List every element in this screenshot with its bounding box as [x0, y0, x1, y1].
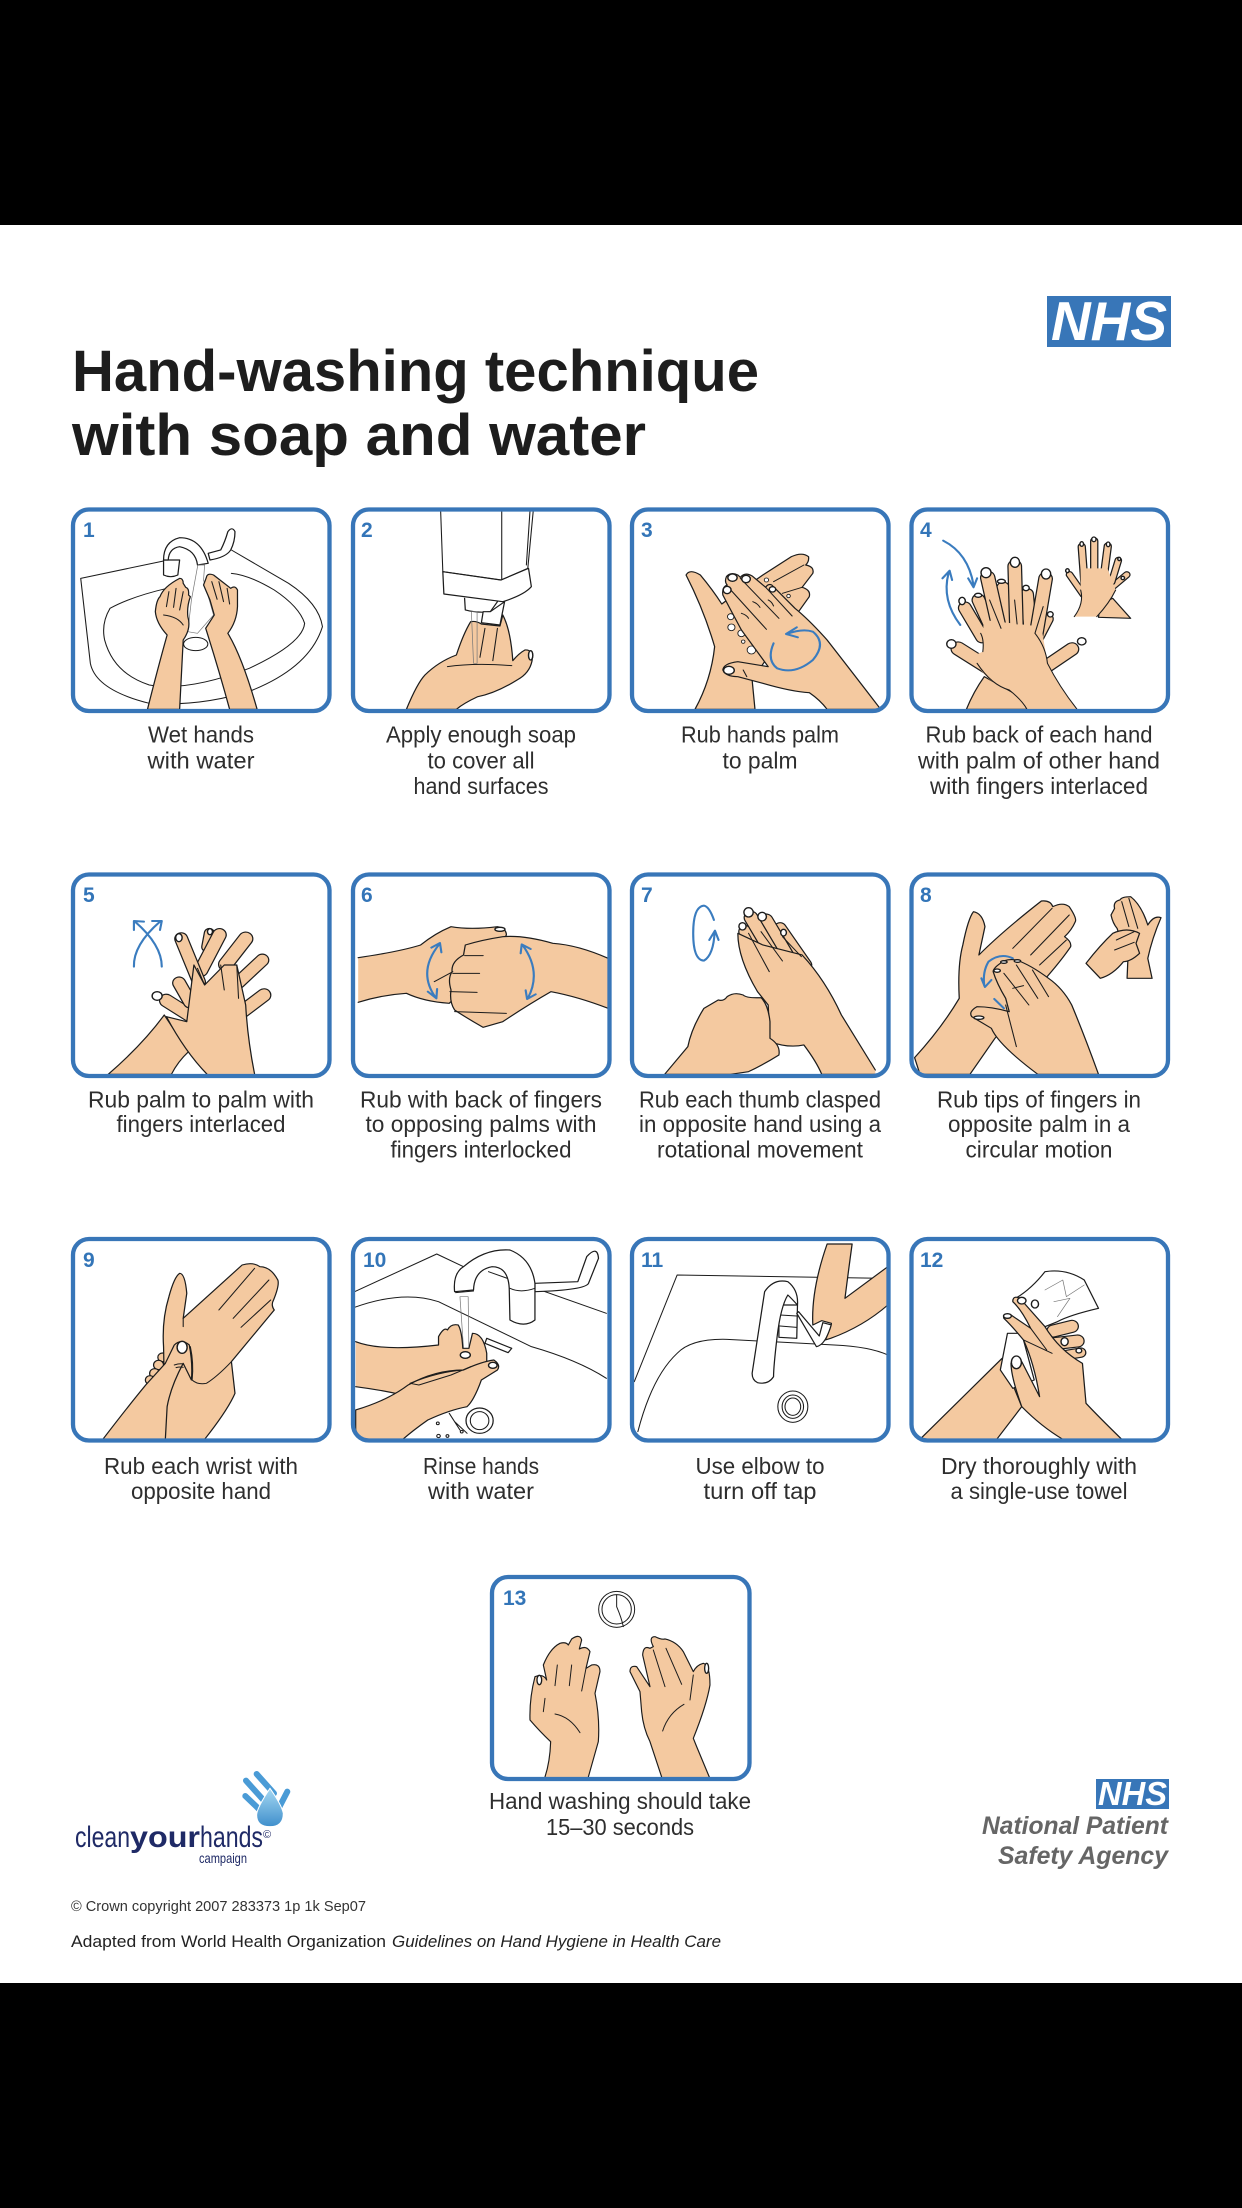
- arrow: rotation: [693, 906, 719, 961]
- caption 12: Dry thoroughly with: [941, 1453, 1137, 1479]
- rear hand: [108, 928, 274, 1074]
- clean your hands logo: ©: [263, 1829, 271, 1841]
- icon: hand with water drop: [245, 1774, 287, 1827]
- panel border: [912, 874, 1168, 1076]
- National Patient Safety Agency logo: [982, 1775, 1170, 1870]
- caption 2: to cover all: [428, 748, 534, 774]
- caption 9: opposite hand: [131, 1478, 271, 1504]
- panel border: [632, 874, 888, 1076]
- step number: 8: [920, 884, 932, 907]
- caption 1: [146, 722, 255, 774]
- step number: 6: [361, 884, 373, 907]
- panel: step 5 fingers interlaced: [73, 874, 330, 1076]
- caption 7: in opposite hand using a: [639, 1111, 881, 1137]
- drain: [466, 1408, 493, 1433]
- caption 12: a single-use towel: [950, 1478, 1128, 1504]
- copyright line: © Crown copyright 2007 283373 1p 1k Sep07: [71, 1898, 366, 1915]
- left hand: [530, 1636, 600, 1777]
- arrow: circular: [771, 627, 820, 670]
- rubbing hand: [971, 960, 1099, 1074]
- National Patient Safety Agency logo: Safety Agency: [998, 1842, 1169, 1870]
- arrows: crossing: [134, 921, 162, 967]
- source line: [71, 1932, 721, 1951]
- soap dispenser: [441, 512, 533, 612]
- step number: 1: [83, 519, 95, 542]
- NHS logo: NHS: [1051, 290, 1167, 352]
- lower hand: [356, 1360, 499, 1439]
- panel border: [73, 1239, 330, 1440]
- caption 13: Hand washing should take: [489, 1788, 751, 1814]
- inset hands: [1065, 537, 1131, 618]
- panel border: [632, 1239, 888, 1440]
- water stream: [460, 1297, 469, 1348]
- panel: step 2 apply soap: [353, 510, 610, 711]
- clean your hands logo: hands: [200, 1821, 263, 1854]
- step number: 2: [361, 519, 373, 542]
- caption 4: with fingers interlaced: [929, 773, 1148, 799]
- panel: step 8 fingertips: [912, 874, 1168, 1076]
- step number: 9: [83, 1249, 95, 1272]
- National Patient Safety Agency logo: NHS: [1098, 1775, 1167, 1812]
- caption 2: Apply enough soap: [386, 722, 576, 748]
- tap: [164, 529, 235, 577]
- caption 11: Use elbow to: [696, 1453, 824, 1479]
- step number: 11: [641, 1249, 664, 1272]
- caption 11: turn off tap: [704, 1478, 816, 1504]
- arm: [813, 1244, 888, 1340]
- step number: 13: [503, 1587, 526, 1610]
- hand: [406, 615, 533, 709]
- right hand: [204, 574, 257, 709]
- sink lines: [634, 1275, 888, 1432]
- panel: step 12 dry: [912, 1239, 1168, 1440]
- caption 10: Rinse hands: [423, 1453, 539, 1479]
- caption 10: with water: [427, 1478, 534, 1504]
- caption 13: [489, 1788, 751, 1840]
- panel: step 11 elbow: [632, 1239, 888, 1440]
- inset hands: [1086, 897, 1161, 978]
- clock: [599, 1591, 635, 1627]
- source line: Guidelines on Hand Hygiene in Health Care: [392, 1932, 721, 1951]
- caption 8: opposite palm in a: [948, 1111, 1130, 1137]
- caption 11: [696, 1453, 824, 1504]
- arrows: two-way: [427, 943, 536, 999]
- panel border: [353, 1239, 610, 1440]
- rear arm: [920, 1358, 1022, 1439]
- panel: step 1 wet hands: [73, 510, 330, 711]
- open hand: [915, 901, 1076, 1074]
- water: [188, 565, 214, 633]
- panel: step 13 finished: [492, 1577, 750, 1779]
- panel border: [492, 1577, 750, 1779]
- front hand: [723, 574, 881, 709]
- front hand: [1004, 1297, 1122, 1439]
- left hand: [358, 927, 506, 1003]
- title: Hand-washing technique: [72, 339, 759, 404]
- caption 1: with water: [146, 748, 255, 774]
- towel: [1000, 1271, 1099, 1388]
- caption 5: [88, 1086, 314, 1137]
- caption 4: [917, 722, 1160, 799]
- front hand: [166, 926, 256, 1074]
- panel: step 4 back of hands: [912, 510, 1168, 711]
- panel: step 3 palm to palm: [632, 510, 888, 711]
- arrow upper: [981, 956, 1013, 987]
- caption 5: Rub palm to palm with: [88, 1086, 314, 1112]
- step number: 5: [83, 884, 95, 907]
- caption 4: with palm of other hand: [917, 748, 1160, 774]
- open hand: [737, 908, 875, 1074]
- panel border: [353, 510, 610, 711]
- step number: 7: [641, 884, 653, 907]
- caption 6: to opposing palms with: [366, 1111, 596, 1137]
- caption 9: Rub each wrist with: [104, 1453, 298, 1479]
- small bar: [485, 1338, 512, 1353]
- panel: step 9 wrist: [73, 1239, 330, 1440]
- step number: 4: [920, 519, 932, 542]
- source line: Adapted from World Health Organization: [71, 1932, 386, 1951]
- panel: step 10 rinse: [353, 1239, 610, 1440]
- clean your hands logo: campaign: [199, 1850, 247, 1866]
- step number: 3: [641, 519, 653, 542]
- tap: [454, 1250, 599, 1324]
- gripping hand: [103, 1341, 192, 1439]
- panel: step 7 rotating thumb: [632, 874, 888, 1076]
- caption 6: [360, 1086, 602, 1162]
- National Patient Safety Agency logo: National Patient: [982, 1812, 1170, 1840]
- panel border: [632, 510, 888, 711]
- step number: 12: [920, 1249, 943, 1272]
- fist: [665, 994, 779, 1074]
- title: [71, 339, 759, 468]
- caption 8: Rub tips of fingers in: [937, 1086, 1141, 1112]
- rear fingers: [1045, 1319, 1087, 1361]
- panel border: [73, 510, 330, 711]
- caption 7: [639, 1086, 881, 1162]
- caption 2: [386, 722, 576, 799]
- panel border: [73, 874, 330, 1076]
- caption 13: 15–30 seconds: [546, 1814, 694, 1840]
- caption 10: [423, 1453, 539, 1504]
- panel border: [912, 510, 1168, 711]
- caption 3: Rub hands palm: [681, 722, 839, 748]
- caption 8: [937, 1086, 1141, 1162]
- sink lines: [355, 1254, 606, 1378]
- front hand: [947, 557, 1086, 709]
- caption 3: [681, 722, 839, 774]
- clean your hands logo: clean: [75, 1821, 130, 1854]
- right hand: [630, 1637, 710, 1777]
- back hand: [686, 554, 813, 709]
- wrapped fingers: [145, 1353, 167, 1384]
- left hand: [147, 578, 190, 709]
- pump: [481, 602, 505, 625]
- panel: step 6 fingers interlocked: [353, 874, 610, 1076]
- right fist: [434, 936, 608, 1027]
- caption 9: [104, 1453, 298, 1504]
- soap bubbles: [727, 578, 790, 654]
- plughole: [778, 1391, 808, 1422]
- panel border: [912, 1239, 1168, 1440]
- arrow lower: [994, 999, 1004, 1008]
- soap stream: [471, 612, 477, 663]
- splashes: [436, 1413, 467, 1438]
- caption 7: rotational movement: [657, 1136, 864, 1162]
- caption 12: [941, 1453, 1137, 1504]
- caption 1: Wet hands: [148, 722, 254, 748]
- open hand: [163, 1264, 278, 1439]
- caption 6: fingers interlocked: [390, 1136, 572, 1162]
- sink: [81, 550, 322, 704]
- step number: 10: [363, 1249, 386, 1272]
- caption 6: Rub with back of fingers: [360, 1086, 602, 1112]
- upper hand: [356, 1325, 487, 1395]
- caption 7: Rub each thumb clasped: [639, 1086, 881, 1112]
- top black band: [0, 0, 1242, 225]
- clean your hands logo: your: [130, 1821, 200, 1854]
- clean your hands logo: [75, 1774, 287, 1866]
- arrows: back and forth: [942, 541, 977, 625]
- bottom black band: [0, 1983, 1242, 2208]
- panel border: [353, 874, 610, 1076]
- title: with soap and water: [71, 403, 646, 468]
- rear hand: [956, 581, 1081, 709]
- caption 5: fingers interlaced: [116, 1111, 286, 1137]
- tap: [752, 1281, 831, 1383]
- caption 3: to palm: [722, 748, 798, 774]
- caption 4: Rub back of each hand: [926, 722, 1152, 748]
- caption 8: circular motion: [966, 1136, 1112, 1162]
- caption 2: hand surfaces: [414, 773, 548, 799]
